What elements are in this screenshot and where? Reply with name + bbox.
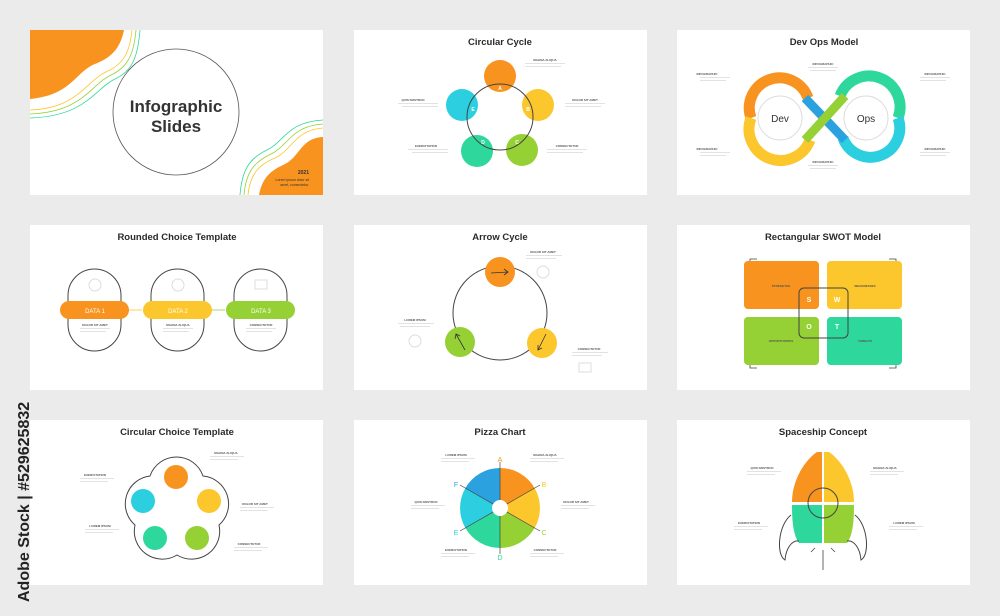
panel: circular choice template: MAGNA ALIQUA bbox=[214, 451, 239, 455]
panel: dev ops model: INFOGRAPHIC bbox=[696, 72, 718, 76]
panel: spaceship concept: Spaceship Concept bbox=[779, 427, 868, 438]
panel: rectangular swot model bbox=[677, 225, 970, 390]
panel: dev ops model: Dev Ops Model bbox=[790, 37, 858, 48]
panel: dev ops model: INFOGRAPHIC bbox=[812, 160, 834, 164]
panel: pizza chart: DOLOR SIT AMET bbox=[563, 500, 589, 504]
circle frame bbox=[113, 49, 239, 175]
panel: rectangular swot model: WEAKNESSES bbox=[854, 284, 876, 288]
panel: dev ops model: INFOGRAPHIC bbox=[696, 147, 718, 151]
panel: circular cycle: C bbox=[515, 140, 519, 146]
panel: circular cycle: Circular Cycle bbox=[468, 37, 532, 48]
panel: infographic slides bbox=[30, 30, 323, 195]
panel: circular choice template bbox=[30, 420, 323, 585]
panel: pizza chart: C bbox=[541, 530, 547, 537]
panel: circular cycle: E bbox=[471, 107, 475, 113]
panel: rounded choice template: DATA 2 bbox=[168, 309, 189, 315]
panel: rectangular swot model: THREATS bbox=[858, 339, 872, 343]
panel: rectangular swot model: OPPORTUNITIES bbox=[769, 339, 793, 343]
panel: rounded choice template: MAGNA ALIQUA bbox=[166, 323, 191, 327]
panel: circular cycle: B bbox=[526, 107, 530, 113]
panel: circular choice template: EXERCITATION bbox=[84, 473, 106, 477]
panel: pizza chart: MAGNA ALIQUA bbox=[533, 453, 558, 457]
panel: arrow cycle: Arrow Cycle bbox=[472, 232, 528, 243]
panel: spaceship concept: EXERCITATION bbox=[738, 521, 760, 525]
title text: Infographic bbox=[130, 97, 222, 116]
panel: rounded choice template: DATA 1 bbox=[85, 309, 106, 315]
panel: pizza chart: D bbox=[497, 555, 503, 562]
panel: circular cycle: DOLOR SIT AMET bbox=[572, 98, 598, 102]
shape: bottom-right orange blob bbox=[259, 137, 323, 195]
panel: circular cycle: A bbox=[498, 86, 502, 92]
shape: top-left orange blob bbox=[30, 30, 124, 99]
year text: 2021 bbox=[298, 170, 309, 176]
panel: rounded choice template bbox=[30, 225, 323, 390]
panel: dev ops model: Dev bbox=[771, 114, 789, 125]
panel: spaceship concept: MAGNA ALIQUA bbox=[873, 466, 898, 470]
panel: pizza chart: F bbox=[454, 482, 458, 489]
panel: pizza chart: Pizza Chart bbox=[474, 427, 526, 438]
panel: arrow cycle: DOLOR SIT AMET bbox=[530, 250, 556, 254]
panel: arrow cycle: LOREM IPSUM bbox=[404, 318, 426, 322]
panel: infographic slides: amet, consectetur. bbox=[280, 183, 309, 187]
panel: pizza chart: E bbox=[454, 530, 459, 537]
panel: circular cycle: EXERCITATION bbox=[415, 144, 437, 148]
panel: rectangular swot model: Rectangular SWOT Model bbox=[765, 232, 881, 243]
panel: circular cycle bbox=[354, 30, 647, 195]
panel: circular choice template: CONSECTETUR bbox=[238, 542, 261, 546]
panel: arrow cycle bbox=[354, 225, 647, 390]
panel: pizza chart: CONSECTETUR bbox=[534, 548, 557, 552]
panel: circular cycle: QUIS NOSTRUD bbox=[401, 98, 425, 102]
panel: rounded choice template: DOLOR SIT AMET bbox=[82, 323, 108, 327]
panel: rectangular swot model: W bbox=[834, 297, 841, 304]
panel: pizza chart: QUIS NOSTRUD bbox=[414, 500, 438, 504]
panel: circular cycle: CONSECTETUR bbox=[556, 144, 579, 148]
panel: dev ops model: INFOGRAPHIC bbox=[924, 147, 946, 151]
panel: rectangular swot model: S bbox=[807, 297, 812, 304]
panel: infographic slides: Lorem ipsum dolor sit bbox=[276, 178, 309, 182]
panel: circular choice template: DOLOR SIT AMET bbox=[242, 502, 268, 506]
panel: dev ops model: INFOGRAPHIC bbox=[812, 62, 834, 66]
panel: infographic slides: Slides bbox=[151, 117, 201, 136]
panel: rectangular swot model: STRENGTHS bbox=[772, 284, 790, 288]
panel: pizza chart: LOREM IPSUM bbox=[445, 453, 467, 457]
panel: rounded choice template: Rounded Choice Template bbox=[117, 232, 237, 243]
panel: dev ops model: Ops bbox=[857, 114, 875, 125]
panel: spaceship concept: LOREM IPSUM bbox=[893, 521, 915, 525]
watermark: vertical stock id: Adobe Stock | #529625832 bbox=[16, 402, 33, 602]
panel: rectangular swot model: O bbox=[806, 324, 812, 331]
panel: pizza chart: B bbox=[542, 482, 547, 489]
panel: dev ops model: INFOGRAPHIC bbox=[924, 72, 946, 76]
panel: rounded choice template: DATA 3 bbox=[251, 309, 272, 315]
panel: rounded choice template: CONSECTETUR bbox=[250, 323, 273, 327]
panel: rectangular swot model: T bbox=[835, 324, 840, 331]
panel: spaceship concept bbox=[677, 420, 970, 585]
panel: pizza chart bbox=[354, 420, 647, 585]
panel: pizza chart: A bbox=[498, 457, 503, 464]
panel: circular choice template: Circular Choice Template bbox=[120, 427, 234, 438]
panel: circular cycle: MAGNA ALIQUA bbox=[533, 58, 558, 62]
panel: dev ops model bbox=[677, 30, 970, 195]
panel: circular cycle: D bbox=[481, 140, 485, 146]
panel: arrow cycle: CONSECTETUR bbox=[578, 347, 601, 351]
panel: circular choice template: LOREM IPSUM bbox=[89, 524, 111, 528]
panel: pizza chart: EXERCITATION bbox=[445, 548, 467, 552]
panel: spaceship concept: QUIS NOSTRUD bbox=[750, 466, 774, 470]
